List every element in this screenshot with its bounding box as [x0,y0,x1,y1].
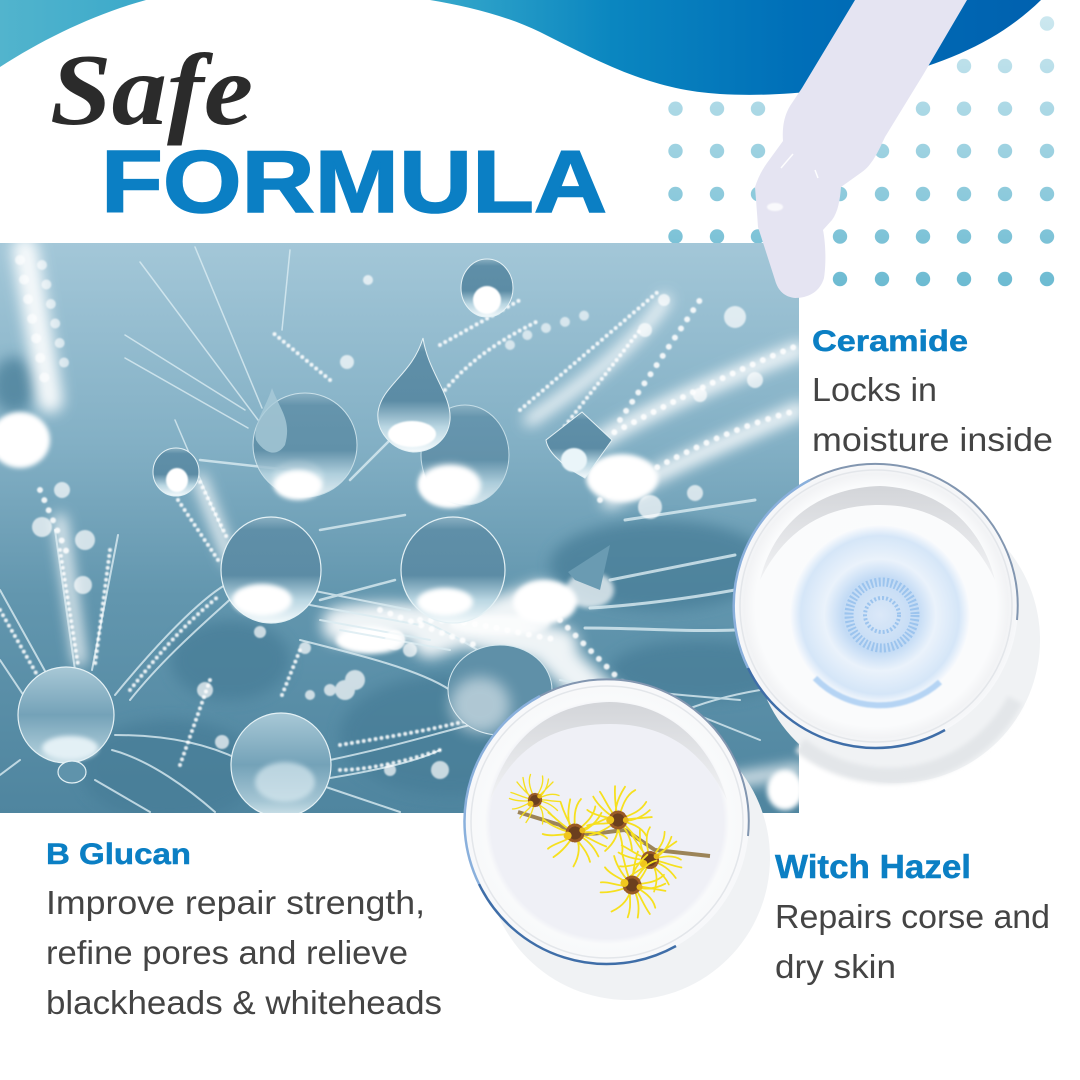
title word: Safe: Safe [50,34,253,147]
top blue wave [430,0,1041,95]
soft dark patches [0,357,790,820]
label: ceramide [812,325,1053,458]
witch hazel dish [464,679,770,1000]
witch hazel flower [510,772,710,931]
photo: water droplets on dandelion seeds [0,243,803,820]
dish rim [464,679,749,964]
dish base [486,716,770,1000]
label: b glucan [46,838,442,1021]
top left wave [0,0,146,67]
dish rim [734,464,1018,748]
dish inner [465,680,749,964]
title word: FORMULA: FORMULA [101,132,607,231]
label: b glucan: B Glucan [46,838,191,871]
label: witch hazel: Witch Hazel [775,848,971,885]
dot grid pattern [668,16,1054,286]
beaded dew lines [0,260,799,770]
label: witch hazel: dry skin [775,948,896,985]
label: witch hazel: Repairs corse and [775,898,1050,935]
droplets behind [253,393,552,735]
label: ceramide: Locks in [812,371,937,408]
lower blue edge [815,678,940,705]
title [50,34,607,231]
blurred white bokeh highlights [0,412,803,810]
ceramide inner ring [849,582,915,648]
thin strands [0,247,760,812]
dish upper shadow crescent [490,702,727,800]
label: ceramide: moisture inside [812,421,1053,458]
dish upper shadow crescent [760,486,995,580]
dropper tip [755,0,967,298]
label: witch hazel [775,848,1050,985]
label: ceramide: Ceramide [812,325,968,358]
label: b glucan: refine pores and relieve [46,934,408,971]
teardrop droplets [153,259,612,590]
dish base [754,497,1040,783]
dish inner [734,464,1018,748]
ceramide swatch [790,525,970,705]
label: b glucan: Improve repair strength, [46,884,425,921]
large bokeh dots [32,275,763,779]
dish lower glass band [800,700,1015,776]
label: b glucan: blackheads & whiteheads [46,984,442,1021]
main droplets [18,517,505,817]
blurred glow strands [25,250,799,800]
ceramide dish [734,464,1040,783]
